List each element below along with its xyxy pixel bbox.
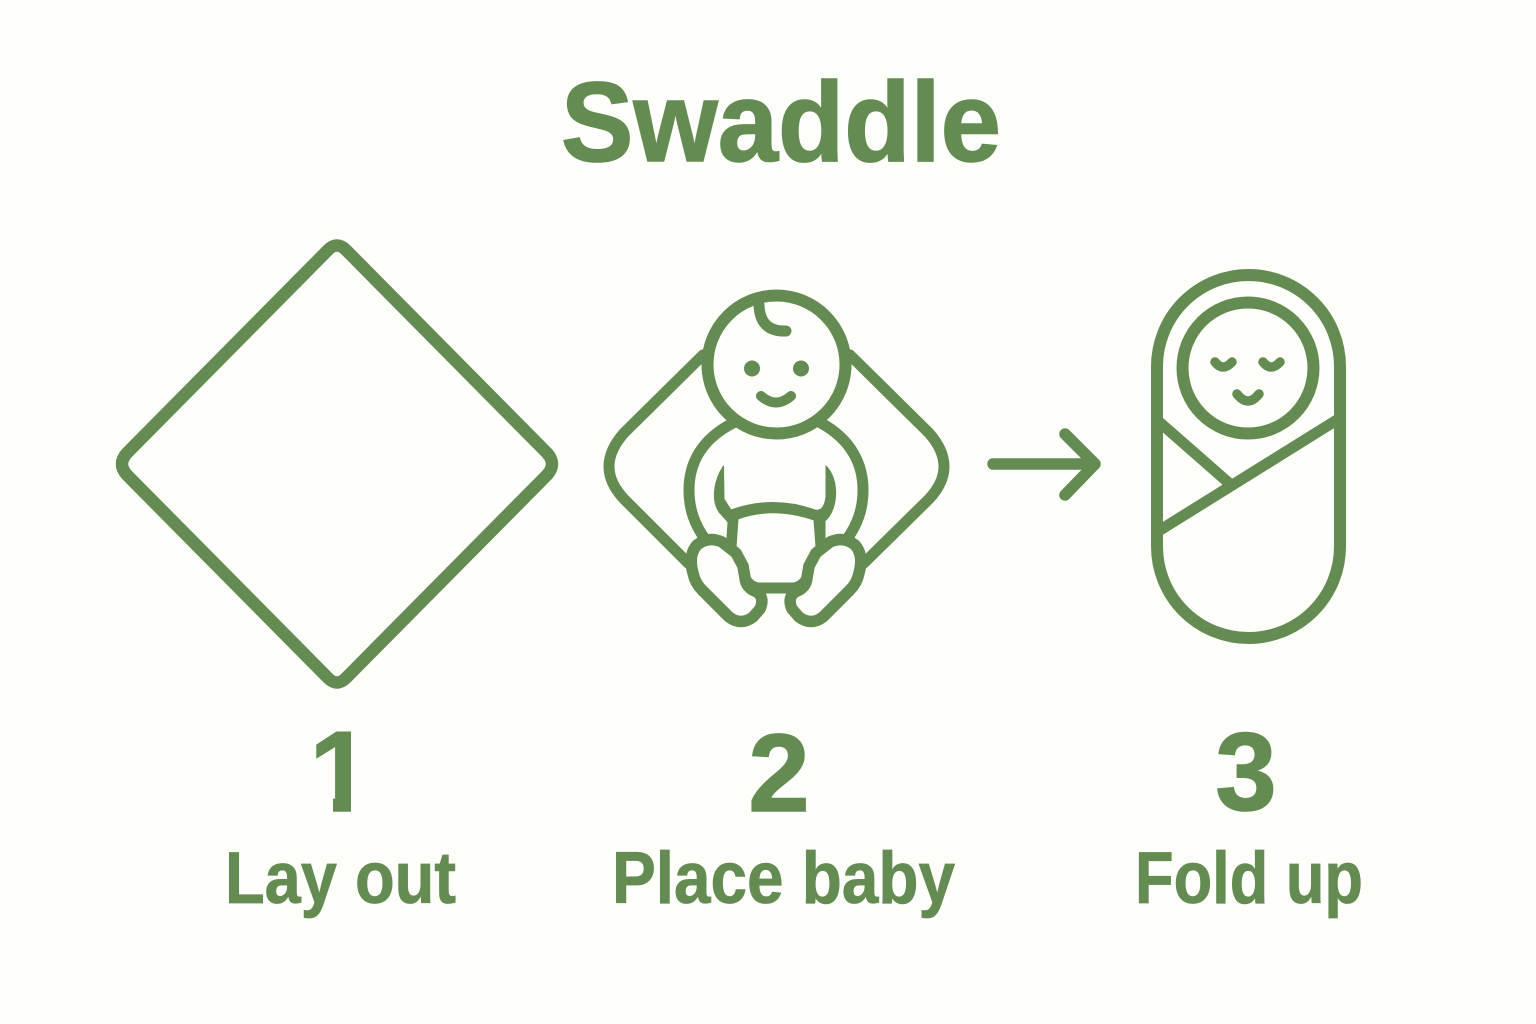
step 2 number: 2 [748,712,810,835]
baby eyes [744,360,809,376]
blanket corners behind baby [609,355,944,563]
swaddle outer capsule [1157,275,1340,638]
baby mouth [761,396,791,402]
step 3 label: Fold up [1135,838,1363,919]
sleeping face [1215,362,1280,401]
step 2 label: Place baby [612,838,955,919]
hair curl [759,305,786,331]
blanket folds [1157,418,1340,532]
icon: blanket laid out as diamond [122,246,552,682]
baby body [689,423,863,539]
step 1 number: 1 [309,709,373,836]
title: Swaddle [561,59,1001,185]
left foot [691,540,762,622]
icon: baby on blanket [609,296,944,622]
baby arms, waist and legs [714,466,836,548]
right foot [790,540,861,622]
swaddled baby head [1182,302,1314,434]
diaper bottom [745,578,807,588]
arrow [993,434,1095,495]
icon: swaddled baby [1157,275,1340,638]
baby head [708,296,846,434]
step 3 number: 3 [1215,711,1277,834]
step 1 label: Lay out [225,838,456,919]
